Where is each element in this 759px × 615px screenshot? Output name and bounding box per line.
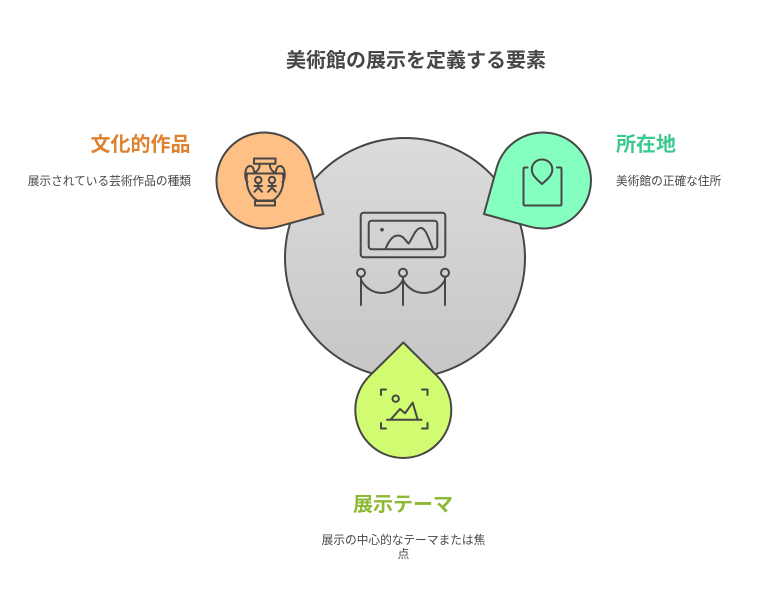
panel: central circle <box>285 138 525 378</box>
title: 美術館の展示を定義する要素 <box>286 48 546 72</box>
panel: location teardrop <box>484 133 591 229</box>
heading: theme: 展示テーマ <box>353 494 453 516</box>
heading: location: 所在地 <box>616 133 676 156</box>
text: artwork description: 展示されている芸術作品の種類 <box>28 174 191 188</box>
text: location description: 美術館の正確な住所 <box>616 174 722 188</box>
icon: greek vase <box>245 158 285 206</box>
text: theme description: 点 <box>398 548 410 561</box>
icon: framed landscape <box>381 390 428 428</box>
icon: map pin in box <box>524 160 562 206</box>
panel: artwork teardrop <box>216 133 323 229</box>
heading: artwork: 文化的作品 <box>90 133 190 156</box>
panel: theme teardrop <box>355 342 451 458</box>
icon: gallery painting and rope barrier <box>357 213 449 305</box>
text: theme description: 展示の中心的なテーマまたは焦 <box>322 533 486 547</box>
